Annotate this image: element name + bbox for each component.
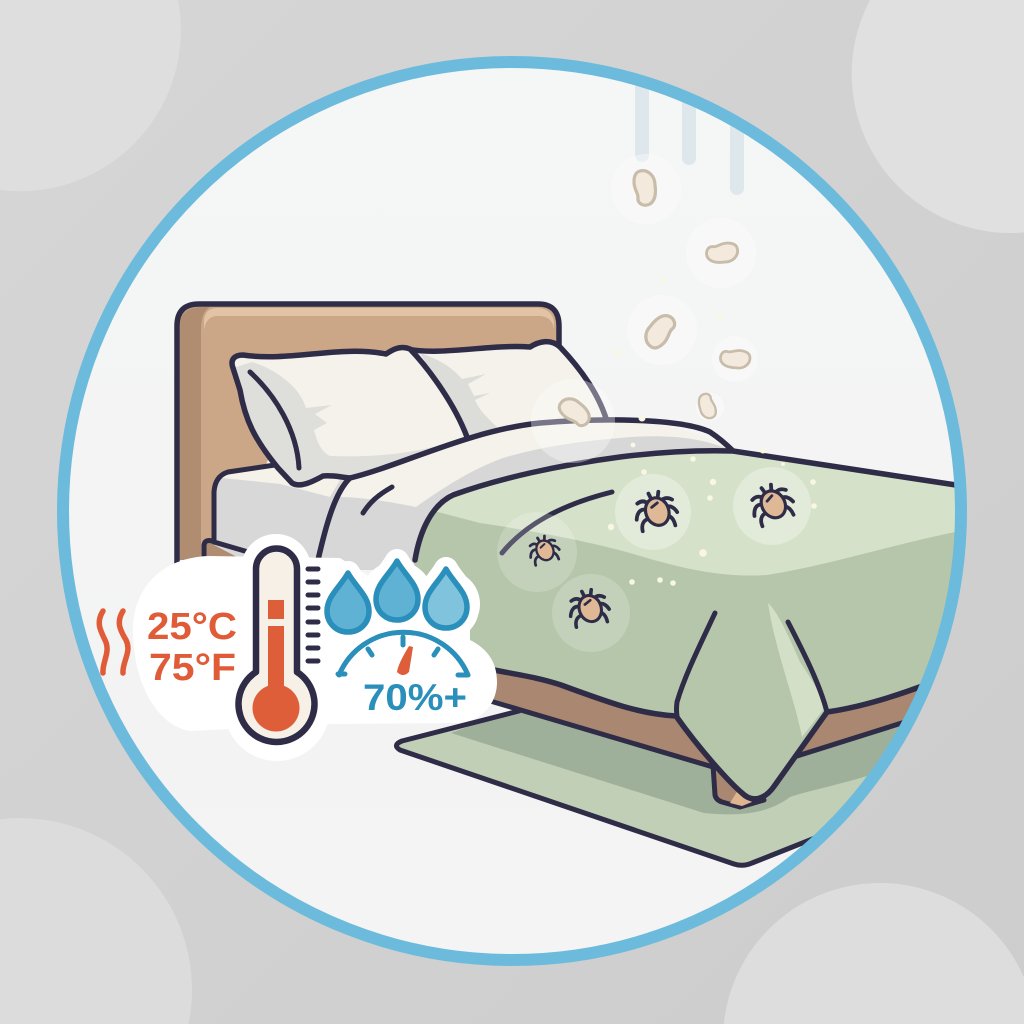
left pillow	[232, 348, 467, 485]
bed frame and leg	[491, 673, 917, 810]
circular scene background	[63, 62, 961, 960]
floating dust dots	[608, 276, 817, 586]
dust mites on comforter	[497, 467, 811, 652]
fold highlight	[768, 603, 823, 737]
heat waves icon	[99, 611, 128, 673]
bed scene	[177, 70, 960, 865]
spores group: halos and beans	[531, 154, 758, 463]
humidity drops	[327, 561, 467, 632]
temperature text: 75°F	[149, 647, 236, 689]
mattress	[212, 463, 344, 558]
bed base side stub	[202, 538, 236, 556]
blue circular ring	[63, 62, 961, 960]
rug	[394, 710, 899, 868]
white sheet	[318, 420, 735, 570]
green comforter	[400, 440, 960, 799]
thermometer scale ticks	[308, 569, 318, 661]
temperature text: 25°C	[147, 606, 237, 648]
humidity gauge	[338, 632, 468, 675]
temperature text	[147, 606, 237, 689]
headboard	[177, 304, 559, 565]
climate callout	[99, 534, 497, 761]
falling air streaks	[642, 70, 737, 188]
white callout backing	[133, 534, 497, 761]
humidity value: 70%+	[363, 677, 467, 718]
right pillow	[403, 342, 608, 440]
thermometer	[238, 548, 314, 742]
